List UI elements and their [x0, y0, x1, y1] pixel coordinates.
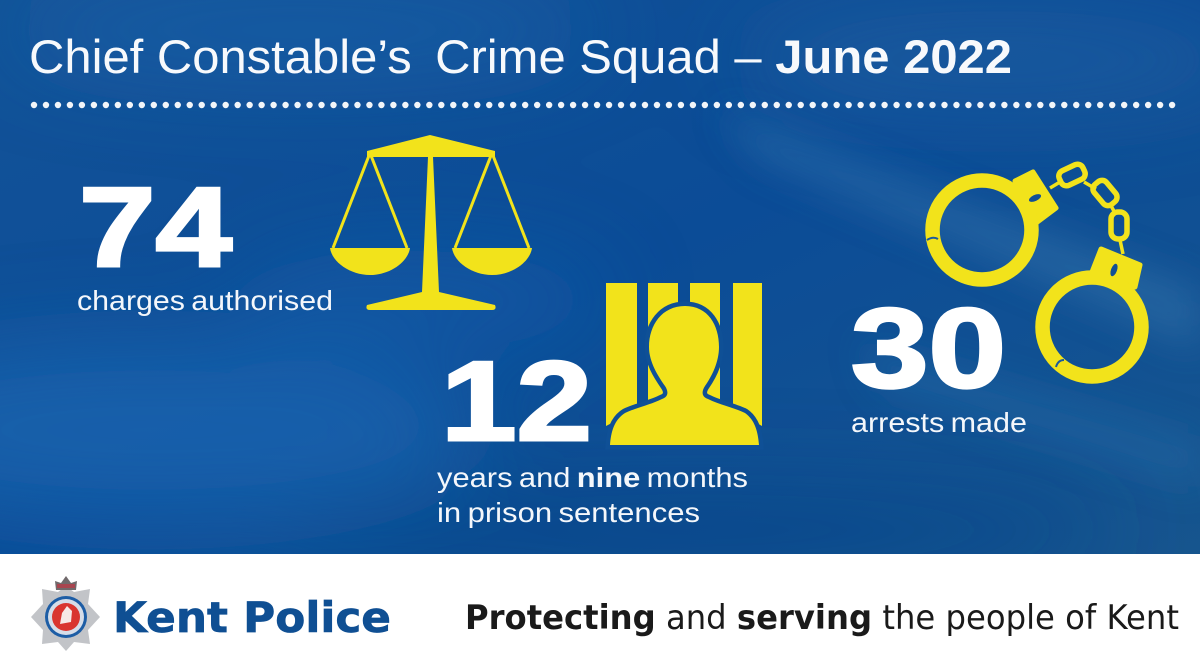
title: Chief Constable’s Crime Squad – June 2022	[29, 30, 1012, 83]
dotted divider	[34, 102, 1174, 108]
stat: 12 years and nine months	[437, 338, 748, 528]
stat: 74 charges authorised	[77, 164, 333, 316]
number: 30: 30	[851, 285, 1006, 411]
footer panel	[0, 554, 1200, 664]
icon: scales of justice	[330, 135, 532, 310]
logo: Kent Police crest	[31, 576, 100, 651]
icon: prisoner behind bars	[606, 283, 762, 445]
stat: 12 years and nine months: in prison sentences	[437, 497, 700, 528]
number: 12: 12	[441, 338, 592, 464]
icon: handcuffs	[927, 162, 1142, 376]
label: charges authorised: charges authorised	[77, 285, 333, 316]
number: 74: 74	[79, 164, 232, 290]
logo text: Kent Police: Kent Police	[113, 593, 391, 642]
tagline: Protecting and serving the people of Kent	[465, 598, 1179, 637]
label: arrests made: arrests made	[851, 407, 1027, 438]
label: years and nine months in prison sentences: years and nine months	[437, 462, 748, 493]
stat: 30 arrests made	[851, 285, 1027, 438]
